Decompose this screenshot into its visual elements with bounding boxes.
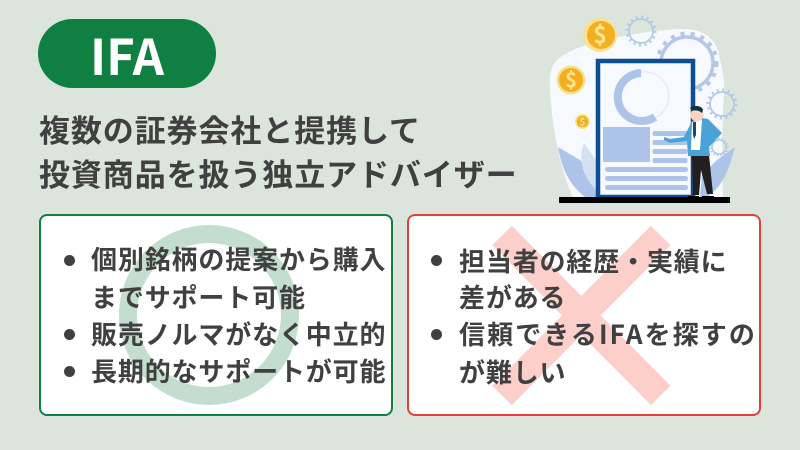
heading: line 2: 投資商品を扱う独立アドバイザー [39, 150, 518, 195]
icon: circle watermark [119, 225, 299, 405]
heading: line 1: 複数の証券会社と提携して [39, 106, 421, 151]
panel: demerits [407, 214, 761, 416]
text: stock proposals: 個別銘柄の提案から購入 [91, 240, 386, 277]
bullet 1 [430, 254, 442, 266]
icon: medium coin: $ [565, 64, 577, 93]
bullet 2 [430, 328, 442, 340]
text: continuation: が難しい [459, 353, 566, 390]
ground bar [559, 197, 730, 203]
text: long-term: 長期的なサポートが可能 [91, 352, 386, 389]
text: finding trustworthy IFA: 信頼できるIFAを探すの [459, 315, 757, 352]
icon: small coin [575, 114, 590, 129]
text: no quota: 販売ノルマがなく中立的 [91, 315, 386, 352]
document [598, 61, 693, 197]
badge: IFA: IFA [90, 19, 164, 90]
icon: large coin: $ [593, 16, 607, 50]
illustration: advisor with document [550, 16, 738, 203]
bullet 1 [64, 254, 74, 266]
badge: IFA [38, 19, 216, 88]
panel: merits [38, 214, 392, 416]
icon: large coin [583, 16, 617, 52]
bullet 3 [64, 366, 74, 376]
text: rep experience: 担当者の経歴・実績に [459, 242, 728, 279]
icon: small coin: $ [580, 114, 586, 128]
figure: advisor [664, 106, 722, 198]
icon: medium coin [556, 64, 586, 94]
text: continuation: 差がある [459, 278, 566, 315]
bullet 2 [64, 328, 74, 340]
icon: cross watermark [492, 226, 670, 405]
text: continuation: までサポート可能 [91, 278, 306, 315]
